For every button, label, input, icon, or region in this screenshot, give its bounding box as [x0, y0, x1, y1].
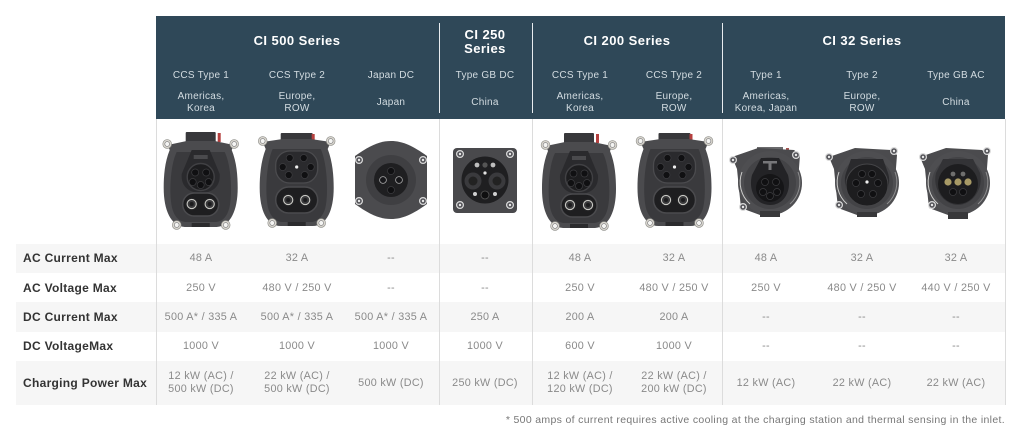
row label: DC Current Max — [23, 310, 118, 324]
row label: AC Voltage Max — [23, 281, 117, 295]
column head: Type GB DC: China — [471, 97, 499, 108]
row: DC VoltageMax: 1000 V — [183, 340, 219, 352]
row: Charging Power Max: 22 kW (AC) — [833, 377, 891, 389]
row: AC Voltage Max: -- — [387, 282, 395, 294]
icon: CI 200 CCS Type 1 inlet — [541, 133, 617, 230]
icon: CI 500 Japan DC inlet — [355, 141, 427, 219]
row: DC VoltageMax: -- — [762, 340, 770, 352]
row: AC Voltage Max: -- — [481, 282, 489, 294]
column head: CCS Type 1 (CI 200): CCS Type 1 — [552, 70, 608, 81]
row: AC Current Max: 48 A — [569, 252, 591, 264]
column head: CCS Type 1: Korea — [187, 103, 215, 114]
column head: Type GB AC: China — [942, 97, 970, 108]
column head: CCS Type 1: Americas, — [178, 91, 224, 102]
row: Charging Power Max — [16, 361, 1005, 405]
row: AC Current Max: 48 A — [190, 252, 212, 264]
row: Charging Power Max: 500 kW (DC) — [168, 382, 234, 394]
column head: Type 2: Type 2 — [846, 70, 878, 81]
row: AC Voltage Max: 250 V — [186, 282, 216, 294]
row: Charging Power Max: 12 kW (AC) — [737, 377, 795, 389]
row: AC Voltage Max — [23, 281, 991, 295]
row: Charging Power Max: 12 kW (AC) / — [547, 370, 613, 382]
row: DC Current Max: 500 A* / 335 A — [355, 311, 427, 323]
column head: CCS Type 2 (CI 200) — [646, 70, 702, 114]
row: DC VoltageMax: -- — [952, 340, 960, 352]
row: DC VoltageMax: -- — [858, 340, 866, 352]
column head: CCS Type 2 (CI 200): CCS Type 2 — [646, 70, 702, 81]
icon: CI 250 Type GB DC inlet — [453, 148, 517, 213]
icon: CI 32 Type 2 inlet — [826, 148, 899, 217]
column head: Type 2 — [844, 70, 880, 114]
row: AC Voltage Max: 480 V / 250 V — [639, 282, 709, 294]
column head: Type 1: Type 1 — [750, 70, 782, 81]
row: AC Current Max: 32 A — [663, 252, 685, 264]
row: DC VoltageMax: 1000 V — [656, 340, 692, 352]
row: AC Current Max: -- — [481, 252, 489, 264]
column head: CCS Type 1 (CI 200): Americas, — [557, 91, 603, 102]
row: Charging Power Max: 200 kW (DC) — [641, 382, 707, 394]
row label: DC VoltageMax — [23, 339, 113, 353]
row: AC Current Max: 32 A — [945, 252, 967, 264]
row: DC VoltageMax: 1000 V — [373, 340, 409, 352]
column head: Japan DC: Japan — [377, 97, 405, 108]
column head: Type GB DC: Type GB DC — [456, 70, 514, 81]
row: DC Current Max: 200 A — [565, 311, 595, 323]
heading: CI 250 Series — [464, 27, 506, 56]
column head: Type 1: Americas, — [743, 91, 789, 102]
heading: CI 250 Series: Series — [464, 41, 506, 56]
row: AC Current Max: 48 A — [755, 252, 777, 264]
heading: CI 500 Series: CI 500 Series — [254, 33, 340, 48]
column head: CCS Type 1 — [173, 70, 229, 114]
footnote: * 500 amps of current requires active cooling at the charging station and thermal sensing in the inlet. — [506, 414, 1005, 426]
icon: CI 200 CCS Type 2 inlet — [636, 133, 713, 227]
row: AC Voltage Max: 480 V / 250 V — [262, 282, 332, 294]
row: Charging Power Max: 250 kW (DC) — [452, 377, 518, 389]
column head: Type GB AC: Type GB AC — [927, 70, 985, 81]
row: DC VoltageMax — [23, 339, 960, 353]
row: DC VoltageMax: 1000 V — [279, 340, 315, 352]
row: DC Current Max: 250 A — [470, 311, 500, 323]
row: AC Voltage Max: 250 V — [751, 282, 781, 294]
row: DC Current Max: -- — [952, 311, 960, 323]
row: Charging Power Max: 22 kW (AC) / — [641, 370, 707, 382]
row: AC Current Max: 32 A — [286, 252, 308, 264]
row label: AC Current Max — [23, 251, 118, 265]
row: Charging Power Max: 22 kW (AC) / — [264, 370, 330, 382]
heading: CI 32 Series: CI 32 Series — [822, 33, 902, 48]
row: DC Current Max: -- — [762, 311, 770, 323]
row: DC Current Max: 200 A — [659, 311, 689, 323]
column head: CCS Type 2: ROW — [284, 103, 310, 114]
column head: Japan DC — [368, 70, 414, 108]
row label: Charging Power Max — [23, 376, 147, 390]
row: Charging Power Max: 22 kW (AC) — [927, 377, 985, 389]
column head: Japan DC: Japan DC — [368, 70, 414, 81]
row: DC Current Max: 500 A* / 335 A — [165, 311, 237, 323]
row: AC Voltage Max: 440 V / 250 V — [921, 282, 991, 294]
column head: Type 1: Korea, Japan — [735, 103, 797, 114]
icon: CI 32 Type 1 inlet — [730, 147, 802, 217]
column head: CCS Type 2 (CI 200): ROW — [661, 103, 687, 114]
row: DC Current Max — [16, 302, 1005, 332]
row: AC Current Max: -- — [387, 252, 395, 264]
row: DC Current Max: 500 A* / 335 A — [261, 311, 333, 323]
row: DC VoltageMax: 1000 V — [467, 340, 503, 352]
column head: CCS Type 2 — [269, 70, 325, 114]
row: Charging Power Max: 500 kW (DC) — [264, 382, 330, 394]
header band — [156, 16, 1005, 119]
row: AC Current Max — [16, 244, 1005, 273]
column head: CCS Type 1: CCS Type 1 — [173, 70, 229, 81]
row: AC Voltage Max: 480 V / 250 V — [827, 282, 897, 294]
column head: CCS Type 1 (CI 200): Korea — [566, 103, 594, 114]
column head: CCS Type 2: CCS Type 2 — [269, 70, 325, 81]
column head: CCS Type 1 (CI 200) — [552, 70, 608, 114]
icon: CI 32 Type GB AC inlet — [920, 148, 990, 219]
column head: Type GB DC — [456, 70, 514, 108]
row: AC Current Max: 32 A — [851, 252, 873, 264]
row: Charging Power Max: 500 kW (DC) — [358, 377, 424, 389]
row: DC Current Max: -- — [858, 311, 866, 323]
column head: Type 2: ROW — [849, 103, 875, 114]
column head: CCS Type 2: Europe, — [279, 91, 315, 102]
column head: Type GB AC — [927, 70, 985, 108]
heading: CI 200 Series: CI 200 Series — [584, 33, 670, 48]
column head: CCS Type 2 (CI 200): Europe, — [656, 91, 692, 102]
icon: CI 500 CCS Type 1 inlet — [163, 132, 239, 229]
row: DC VoltageMax: 600 V — [565, 340, 595, 352]
row: AC Voltage Max: 250 V — [565, 282, 595, 294]
icon: CI 500 CCS Type 2 inlet — [258, 133, 335, 227]
row: Charging Power Max: 12 kW (AC) / — [168, 370, 234, 382]
column head: Type 1 — [735, 70, 797, 114]
column head: Type 2: Europe, — [844, 91, 880, 102]
heading: CI 250 Series: CI 250 — [464, 27, 506, 42]
row: Charging Power Max: 120 kW (DC) — [547, 382, 613, 394]
